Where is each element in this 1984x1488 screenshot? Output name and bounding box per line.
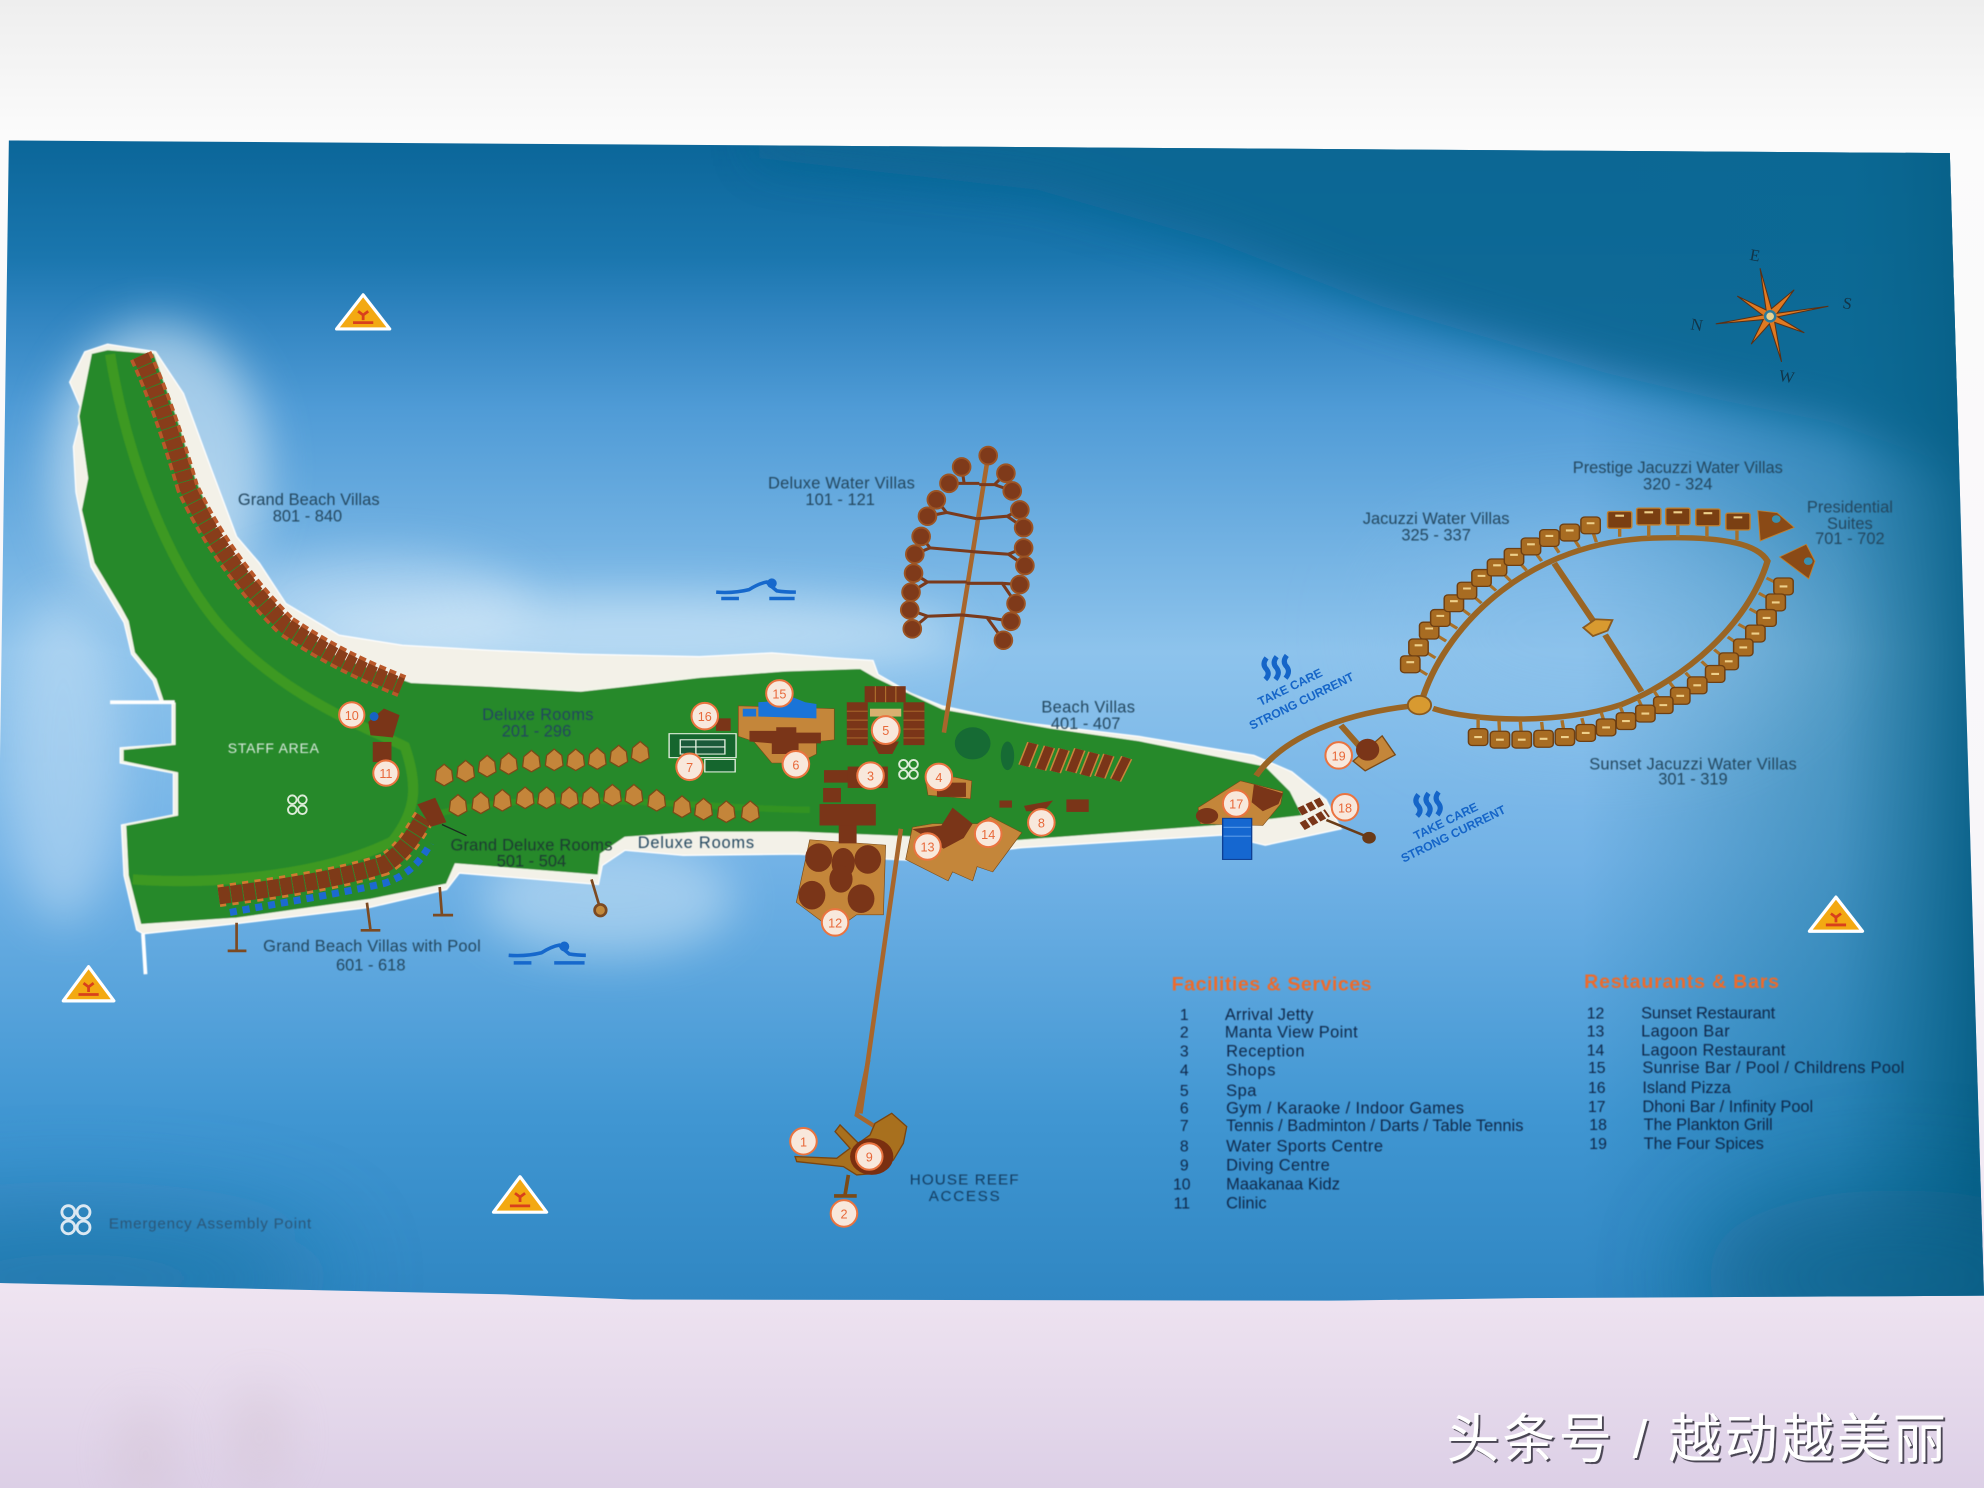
numbered markers: 18: [1338, 801, 1352, 815]
assembly point icons: [62, 760, 918, 1234]
strong current warnings: TAKE CARE: [1411, 800, 1480, 843]
area labels: 501 - 504: [497, 853, 566, 871]
restaurants list: Sunset Restaurant: [1641, 1005, 1776, 1023]
compass rose: [1689, 245, 1854, 387]
area labels: [109, 459, 1893, 1233]
restaurants list: [1587, 1005, 1904, 1153]
water sports huts: [999, 799, 1089, 812]
private pools: [230, 843, 431, 912]
numbered markers: 12: [828, 916, 842, 930]
restaurants list: The Plankton Grill: [1644, 1116, 1773, 1134]
facilities heading: Facilities & Services: [1172, 974, 1372, 996]
lagoon pad: [906, 817, 1022, 881]
loop walkway: [1256, 538, 1768, 776]
facilities list: 3: [1180, 1044, 1189, 1061]
facilities list: Arrival Jetty: [1225, 1006, 1314, 1024]
facilities list: Gym / Karaoke / Indoor Games: [1226, 1099, 1464, 1117]
deluxe water villas: [901, 447, 1034, 733]
restaurants list: Lagoon Restaurant: [1641, 1041, 1786, 1059]
south piers: [228, 879, 606, 951]
compass rose: W: [1777, 366, 1796, 387]
area labels: 101 - 121: [805, 491, 875, 509]
water villas: [901, 447, 1034, 649]
area labels: Suites: [1827, 515, 1873, 533]
numbered markers: 19: [1332, 749, 1346, 763]
area labels: Grand Deluxe Rooms: [450, 836, 612, 854]
dhoni bar pad: [1198, 781, 1283, 825]
restaurants list: 12: [1587, 1006, 1604, 1023]
central buildings: [669, 686, 1283, 931]
restaurants list: Dhoni Bar / Infinity Pool: [1642, 1098, 1813, 1116]
grand beach villas row: [141, 356, 402, 686]
grand deluxe room block: [417, 798, 446, 827]
watermark: 头条号 / 越动越美丽: [1446, 1411, 1946, 1470]
facilities list: Shops: [1226, 1062, 1275, 1080]
evacuation triangles: [63, 295, 1863, 1212]
dhoni bar roofs: [1196, 784, 1283, 824]
restaurants list: Island Pizza: [1642, 1079, 1732, 1097]
numbered markers: 8: [1038, 817, 1045, 831]
area labels: ACCESS: [929, 1188, 1000, 1205]
facilities list: Maakanaa Kidz: [1226, 1175, 1340, 1193]
facilities list: 7: [1180, 1118, 1189, 1135]
facilities list: 8: [1180, 1138, 1189, 1155]
restaurants list: Sunrise Bar / Pool / Childrens Pool: [1642, 1059, 1904, 1077]
facilities list: Reception: [1226, 1043, 1305, 1061]
sunrise bar roof: [749, 727, 821, 754]
prestige jacuzzi water villas 320-324: [1608, 508, 1750, 530]
island: [70, 344, 1341, 974]
infinity pool: [1223, 818, 1252, 859]
numbered markers: 1: [800, 1135, 807, 1149]
strong current warnings: STRONG CURRENT: [1247, 670, 1357, 733]
shops: [925, 777, 972, 799]
main jetty: [860, 829, 901, 1113]
tennis court: [669, 734, 736, 772]
numbered markers: 11: [379, 767, 392, 781]
numbered markers: 7: [686, 761, 693, 775]
four spices restaurant: [1353, 736, 1395, 771]
compass rose: E: [1748, 245, 1762, 265]
jacuzzi water villas 325-337: [1401, 517, 1600, 673]
area labels: 801 - 840: [273, 507, 342, 525]
area labels: 601 - 618: [336, 956, 405, 974]
presidential suites: [1758, 511, 1815, 579]
water villa branches: [910, 467, 1025, 640]
area labels: 320 - 324: [1643, 476, 1713, 494]
facilities list: Spa: [1226, 1082, 1257, 1100]
legend: restaurants and bars: [1584, 971, 1904, 1153]
buildings 10 and 11: [368, 708, 400, 762]
restaurants list: Lagoon Bar: [1641, 1022, 1730, 1040]
area labels: Sunset Jacuzzi Water Villas: [1589, 755, 1797, 773]
facilities list: 10: [1173, 1176, 1191, 1193]
area labels: Jacuzzi Water Villas: [1363, 510, 1510, 528]
house reef pavilion: [795, 1060, 907, 1196]
facilities list: Tennis / Badminton / Darts / Table Tennis: [1226, 1117, 1523, 1135]
area labels: STAFF AREA: [228, 740, 320, 756]
beach villas 401-407: [1024, 743, 1127, 780]
numbered markers: 5: [882, 724, 889, 738]
strong current warnings: TAKE CARE: [1256, 666, 1325, 709]
restaurants list: 14: [1587, 1042, 1605, 1059]
compass rose: S: [1841, 293, 1854, 313]
grand beach villas inner row: [141, 356, 402, 686]
lawn paths: [110, 354, 413, 881]
numbered markers: [339, 680, 1358, 1227]
numbered markers: 9: [866, 1151, 873, 1165]
restaurants list: 16: [1588, 1080, 1606, 1097]
area labels: 701 - 702: [1815, 530, 1885, 548]
deluxe rooms huts: [435, 741, 759, 822]
numbered markers: 4: [935, 771, 942, 785]
hut connectors: [1410, 516, 1784, 740]
strong current warnings: [1247, 655, 1508, 865]
numbered markers: 3: [867, 770, 874, 784]
strong current warnings: STRONG CURRENT: [1399, 802, 1508, 865]
numbered markers: 2: [840, 1207, 847, 1221]
sunrise pool: [743, 697, 816, 718]
island green: [78, 349, 1303, 925]
water villa walkway: [944, 456, 988, 733]
restaurants list: 17: [1588, 1099, 1606, 1116]
spa: [847, 686, 924, 754]
legend: facilities and services: [1172, 974, 1523, 1212]
area labels: Grand Beach Villas: [238, 491, 380, 509]
island sand: [70, 344, 1341, 934]
facilities list: 5: [1180, 1083, 1189, 1100]
facilities list: 6: [1180, 1100, 1189, 1117]
west side villas and buildings: [141, 356, 606, 951]
grand deluxe pointer: [442, 825, 466, 836]
numbered markers: 15: [772, 687, 786, 701]
harbour lines: [110, 702, 175, 974]
water villa loop: [1256, 508, 1815, 844]
area labels: Presidential: [1807, 498, 1893, 516]
facilities list: Water Sports Centre: [1226, 1137, 1383, 1155]
numbered markers: 10: [345, 709, 359, 723]
facilities list: 2: [1180, 1025, 1189, 1042]
area labels: 325 - 337: [1401, 526, 1471, 544]
numbered markers: 17: [1229, 798, 1243, 812]
area labels: Deluxe Rooms: [638, 834, 754, 852]
hut highlights: [1406, 512, 1787, 740]
area labels: 301 - 319: [1658, 770, 1728, 788]
sunset jacuzzi water villas 301-319: [1468, 578, 1793, 748]
facilities list: 4: [1180, 1063, 1189, 1080]
area labels: 201 - 296: [502, 722, 571, 740]
plankton grill jetty: [1300, 800, 1376, 844]
area labels: Emergency Assembly Point: [109, 1216, 312, 1233]
shop roofs: [937, 783, 966, 797]
area labels: Grand Beach Villas with Pool: [263, 938, 481, 956]
facilities list: [1173, 1006, 1523, 1212]
area labels: HOUSE REEF: [910, 1171, 1019, 1188]
restaurants list: 18: [1589, 1117, 1607, 1134]
facilities list: 11: [1174, 1195, 1190, 1212]
facilities list: 9: [1180, 1157, 1189, 1174]
restaurants list: 19: [1589, 1136, 1607, 1153]
villas with pool roofs: [219, 818, 424, 896]
restaurants list: The Four Spices: [1644, 1135, 1764, 1153]
swimmers: [509, 580, 796, 963]
numbered markers: 14: [981, 828, 995, 842]
hub platforms: [1408, 619, 1612, 714]
garden trees: [955, 727, 1014, 770]
reception: [824, 767, 888, 788]
area labels: Beach Villas: [1041, 698, 1135, 716]
area labels: Prestige Jacuzzi Water Villas: [1573, 459, 1783, 477]
water: [0, 140, 1984, 1301]
facilities list: Manta View Point: [1225, 1024, 1358, 1042]
grand beach villas with pool row: [219, 818, 424, 896]
island pizza hut: [716, 718, 731, 731]
map sheet: [0, 140, 1984, 1301]
numbered markers: 6: [792, 758, 799, 772]
facilities list: Diving Centre: [1226, 1156, 1330, 1174]
sunrise bar pad: [738, 706, 834, 763]
restaurants heading: Restaurants & Bars: [1584, 971, 1779, 993]
numbered markers: 16: [698, 710, 712, 724]
lagoon roofs: [912, 808, 973, 849]
sunset restaurant pad: [796, 840, 886, 931]
facilities list: Clinic: [1226, 1194, 1267, 1212]
facilities list: 1: [1180, 1007, 1189, 1024]
numbered markers: 13: [920, 841, 935, 855]
compass rose: N: [1689, 314, 1704, 335]
area labels: Deluxe Rooms: [482, 706, 593, 724]
area labels: 401 - 407: [1051, 715, 1120, 733]
sunset restaurant roofs: [799, 788, 881, 913]
restaurants list: 13: [1587, 1023, 1605, 1040]
restaurants list: 15: [1588, 1060, 1606, 1077]
area labels: Deluxe Water Villas: [768, 474, 915, 492]
